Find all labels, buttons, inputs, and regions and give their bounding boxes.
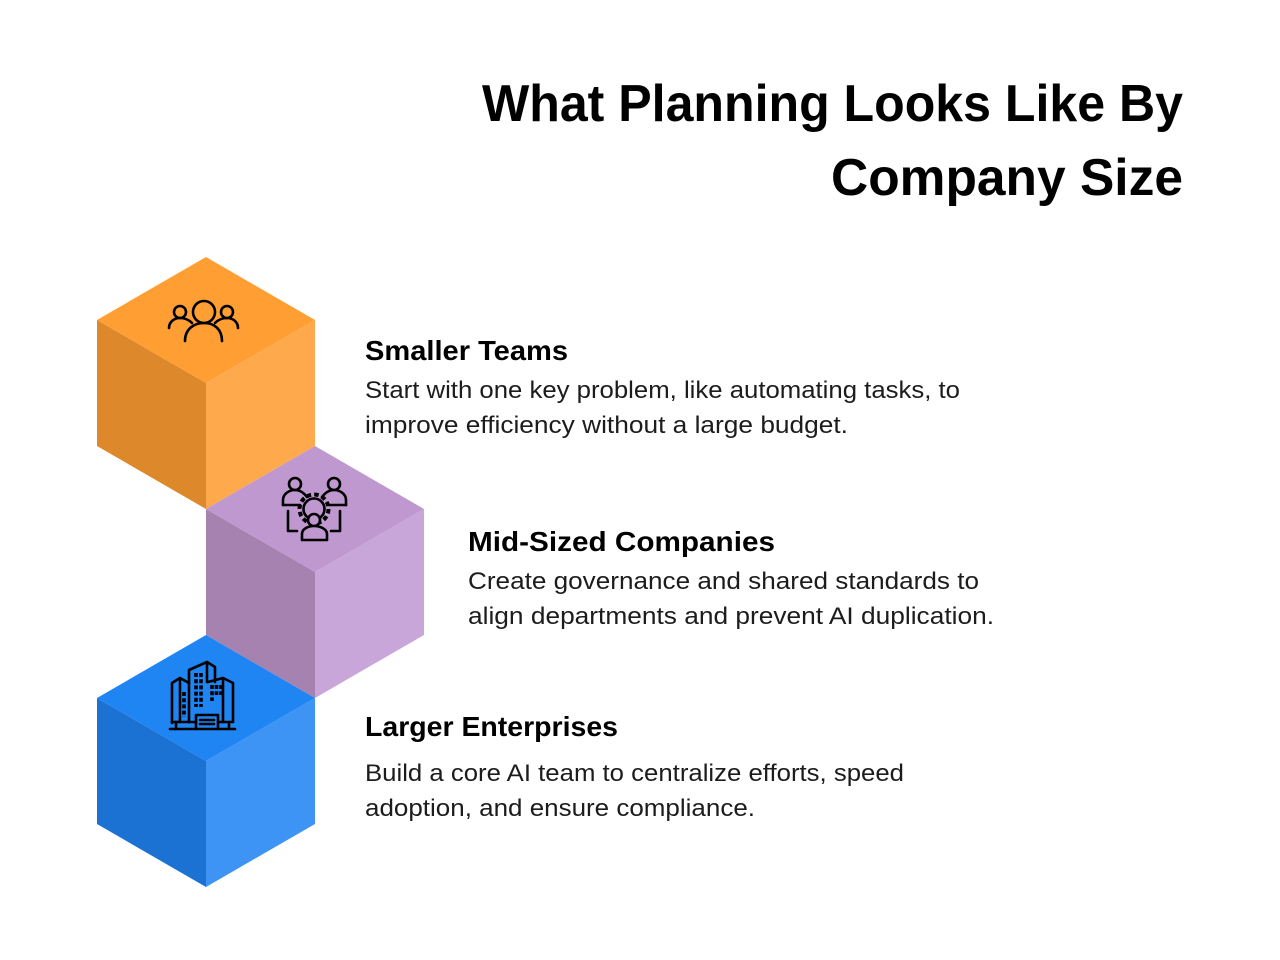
text block: larger enterprises: Larger Enterprises [365,711,618,742]
text block: smaller teams: Smaller Teams [365,335,568,366]
text block: larger enterprises: Build a core AI team to centralize efforts, speed [365,760,904,787]
title: Company Size [831,149,1183,207]
purple cube [206,446,424,698]
icon: people around a gear [283,478,346,540]
text block: larger enterprises: adoption, and ensure compliance. [365,795,755,822]
icon: office buildings [170,662,235,729]
text block: larger enterprises [365,711,904,822]
orange cube [97,257,315,509]
text block: mid-sized companies: align departments and prevent AI duplication. [468,603,994,630]
text block: mid-sized companies: Create governance and shared standards to [468,568,979,595]
text block: smaller teams: Start with one key problem, like automating tasks, to [365,377,960,404]
icon: team of three people [169,301,238,341]
text block: mid-sized companies [468,526,994,630]
text block: smaller teams: improve efficiency without a large budget. [365,412,848,439]
title: What Planning Looks Like By [482,75,1183,133]
text block: mid-sized companies: Mid-Sized Companies [468,526,775,557]
blue cube [97,635,315,887]
text block: smaller teams [365,335,960,439]
title [482,75,1183,207]
